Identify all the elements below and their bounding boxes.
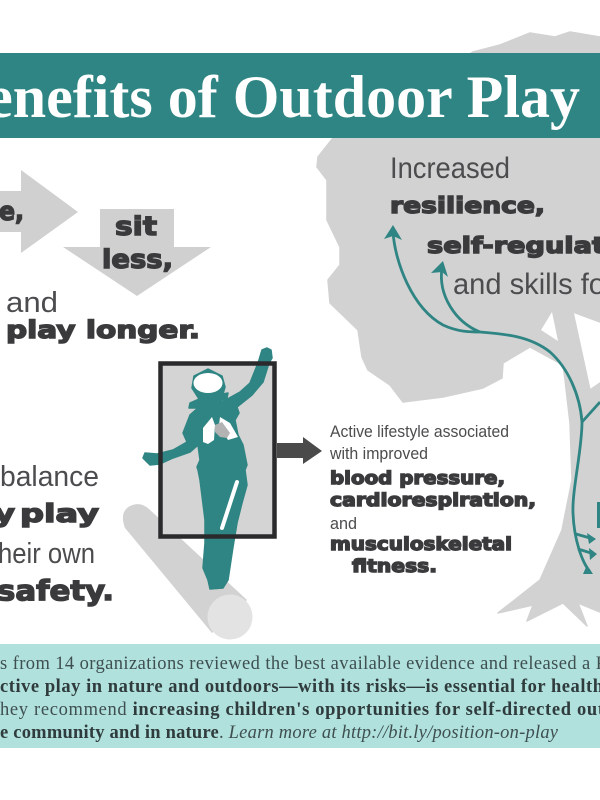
lungs: [203, 417, 238, 444]
bottom panel: ctive play in nature and outdoors—with its risks—is essential for health: [0, 677, 600, 697]
text: balance risky play safety: balance: [0, 461, 99, 493]
text: active lifestyle: fitness.: [352, 556, 437, 577]
brain: [194, 373, 222, 393]
text: balance risky play safety: [0, 461, 114, 607]
text: balance risky play safety: safety.: [0, 574, 114, 607]
text: resilience: resilience,: [390, 194, 545, 219]
title banner: [0, 53, 600, 138]
dark arrow: [277, 437, 322, 464]
bottom panel: hey recommend increasing children's opportunities for self-directed out: [0, 700, 600, 720]
text: active lifestyle: musculoskeletal: [330, 534, 512, 555]
down arrow: sit less: sit: [115, 212, 157, 242]
text: resilience: [390, 152, 600, 301]
text: resilience: self-regulat: [427, 234, 600, 259]
bottom panel: [0, 644, 600, 748]
teal arrows in tree: [384, 225, 600, 574]
text: balance risky play safety: play: [20, 499, 99, 528]
text: and play longer: [6, 287, 200, 344]
text: resilience: Increased: [390, 152, 510, 185]
teal figure edge: [597, 502, 600, 528]
x-ray frame: [160, 364, 274, 536]
down arrow: sit less: less,: [102, 245, 173, 275]
x-ray frame background: [160, 363, 275, 537]
text: active lifestyle: with improved: [329, 444, 428, 463]
bottom panel: e community and in nature. Learn more at http://bit.ly/position-on-play: [0, 723, 559, 743]
panel text: s from 14 organizations reviewed the best available evidence and released a P: [0, 654, 600, 674]
child figure: [143, 348, 272, 589]
text: and play longer: play longer.: [6, 316, 200, 344]
text: active lifestyle: [329, 422, 536, 577]
text: and play longer: and: [6, 287, 58, 319]
log: [123, 504, 252, 640]
text: active lifestyle: and: [330, 514, 357, 533]
tree illustration: [317, 32, 600, 626]
text: active lifestyle: cardiorespiration,: [330, 490, 536, 511]
text: active lifestyle: blood pressure,: [330, 468, 505, 489]
right arrow: move: [0, 170, 78, 253]
bone: [222, 482, 237, 528]
text: active lifestyle: Active lifestyle associated: [330, 422, 509, 441]
heart: [215, 422, 230, 438]
text: balance risky play safety: heir own: [0, 538, 95, 570]
down arrow: sit less: [63, 209, 211, 296]
